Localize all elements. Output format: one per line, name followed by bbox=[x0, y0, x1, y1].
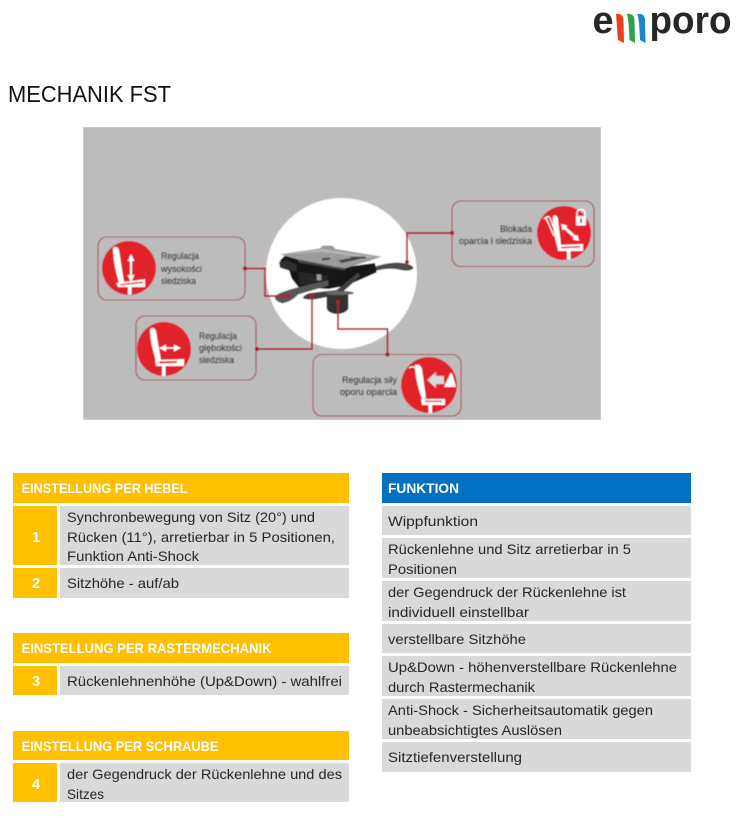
row 4: Sitzes bbox=[67, 786, 104, 802]
row 1 bbox=[13, 506, 349, 565]
row: Sitztiefe: Sitztiefenverstellung bbox=[388, 749, 522, 765]
icon: backrest resistance bbox=[401, 357, 457, 413]
row: Up&Down: Up&Down - höhenverstellbare Rückenlehne bbox=[388, 659, 677, 675]
label: backrest and seat lock bbox=[459, 224, 533, 247]
row: Sitzhöhe: verstellbare Sitzhöhe bbox=[388, 631, 526, 647]
label: seat height: Regulacja bbox=[161, 251, 200, 262]
icon: backrest lock bbox=[537, 206, 591, 260]
row 3: 3 bbox=[32, 674, 40, 690]
row: arretierbar: Rückenlehne und Sitz arretierbar in 5 bbox=[388, 541, 631, 557]
row: Anti-Shock bbox=[382, 699, 691, 739]
row: Gegendruck: der Gegendruck der Rückenlehne ist bbox=[388, 584, 626, 600]
row: Gegendruck: individuell einstellbar bbox=[388, 604, 529, 620]
heading bbox=[13, 473, 349, 503]
panel: mechanism diagram bbox=[83, 127, 601, 420]
label: seat height: siedziska bbox=[161, 276, 197, 287]
heading: EINSTELLUNG PER HEBEL bbox=[22, 480, 188, 496]
heading: EINSTELLUNG PER RASTERMECHANIK bbox=[22, 640, 272, 656]
label: backrest resistance: oporu oparcia bbox=[340, 387, 398, 398]
row 4: der Gegendruck der Rückenlehne und des bbox=[67, 766, 342, 782]
row 3 bbox=[13, 666, 349, 695]
callout: backrest resistance bbox=[313, 300, 461, 416]
row: Anti-Shock: unbeabsichtigtes Auslösen bbox=[388, 722, 562, 738]
label: backrest resistance bbox=[340, 375, 398, 398]
label: seat height bbox=[160, 251, 202, 287]
table: Funktion bbox=[382, 473, 691, 772]
row 2: Sitzhöhe - auf/ab bbox=[67, 575, 179, 591]
row: Up&Down: durch Rastermechanik bbox=[388, 679, 536, 695]
label: backrest and seat lock: Blokada bbox=[500, 224, 533, 235]
mechanism photo bbox=[275, 246, 414, 314]
row: Anti-Shock: Anti-Shock - Sicherheitsautomatik gegen bbox=[388, 702, 653, 718]
row 4 bbox=[13, 763, 349, 802]
row: Up&Down bbox=[382, 656, 691, 696]
row 3: Rückenlehnenhöhe (Up&Down) - wahlfrei bbox=[67, 673, 342, 689]
logo: emporo bbox=[592, 0, 732, 43]
label: seat depth: siedziska bbox=[199, 355, 235, 366]
table: Einstellung per Rastermechanik bbox=[13, 633, 349, 695]
logo: emporo: e bbox=[592, 0, 614, 42]
row: arretierbar bbox=[382, 538, 691, 578]
table: Einstellung per Schraube bbox=[13, 731, 349, 802]
logo: emporo: poro bbox=[650, 0, 732, 42]
row 1: 1 bbox=[32, 530, 40, 546]
callout: seat depth bbox=[136, 293, 314, 380]
row 1: Rücken (11°), arretierbar in 5 Positionen, bbox=[67, 529, 335, 545]
icon: seat depth bbox=[137, 322, 191, 376]
label: seat height: wysokości bbox=[160, 264, 202, 275]
row: Gegendruck bbox=[382, 581, 691, 621]
table: Einstellung per Hebel bbox=[13, 473, 349, 598]
row: Sitzhöhe bbox=[382, 624, 691, 653]
icon: seat height bbox=[102, 241, 156, 295]
row: Wippfunktion bbox=[382, 506, 691, 535]
row: arretierbar: Positionen bbox=[388, 561, 457, 577]
row 2 bbox=[13, 568, 349, 598]
row 1: Funktion Anti-Shock bbox=[67, 548, 200, 564]
title: MECHANIK FST bbox=[8, 81, 171, 107]
callout: seat height bbox=[98, 237, 290, 300]
heading: FUNKTION bbox=[388, 480, 459, 496]
label: backrest resistance: Regulacja siły bbox=[342, 375, 397, 386]
heading bbox=[382, 473, 691, 503]
heading bbox=[13, 731, 349, 760]
row 1: Synchronbewegung von Sitz (20°) und bbox=[67, 509, 315, 525]
label: seat depth: Regulacja bbox=[199, 331, 238, 342]
label: seat depth bbox=[199, 331, 242, 366]
row: Wippfunktion: Wippfunktion bbox=[388, 513, 478, 529]
row 2: 2 bbox=[32, 576, 40, 592]
label: backrest and seat lock: oparcia i siedziska bbox=[459, 236, 533, 247]
row: Sitztiefe bbox=[382, 742, 691, 772]
heading bbox=[13, 633, 349, 663]
row 4: 4 bbox=[32, 777, 40, 793]
label: seat depth: głębokości bbox=[199, 343, 242, 354]
callout: backrest and seat lock bbox=[405, 201, 594, 266]
heading: EINSTELLUNG PER SCHRAUBE bbox=[22, 738, 218, 754]
